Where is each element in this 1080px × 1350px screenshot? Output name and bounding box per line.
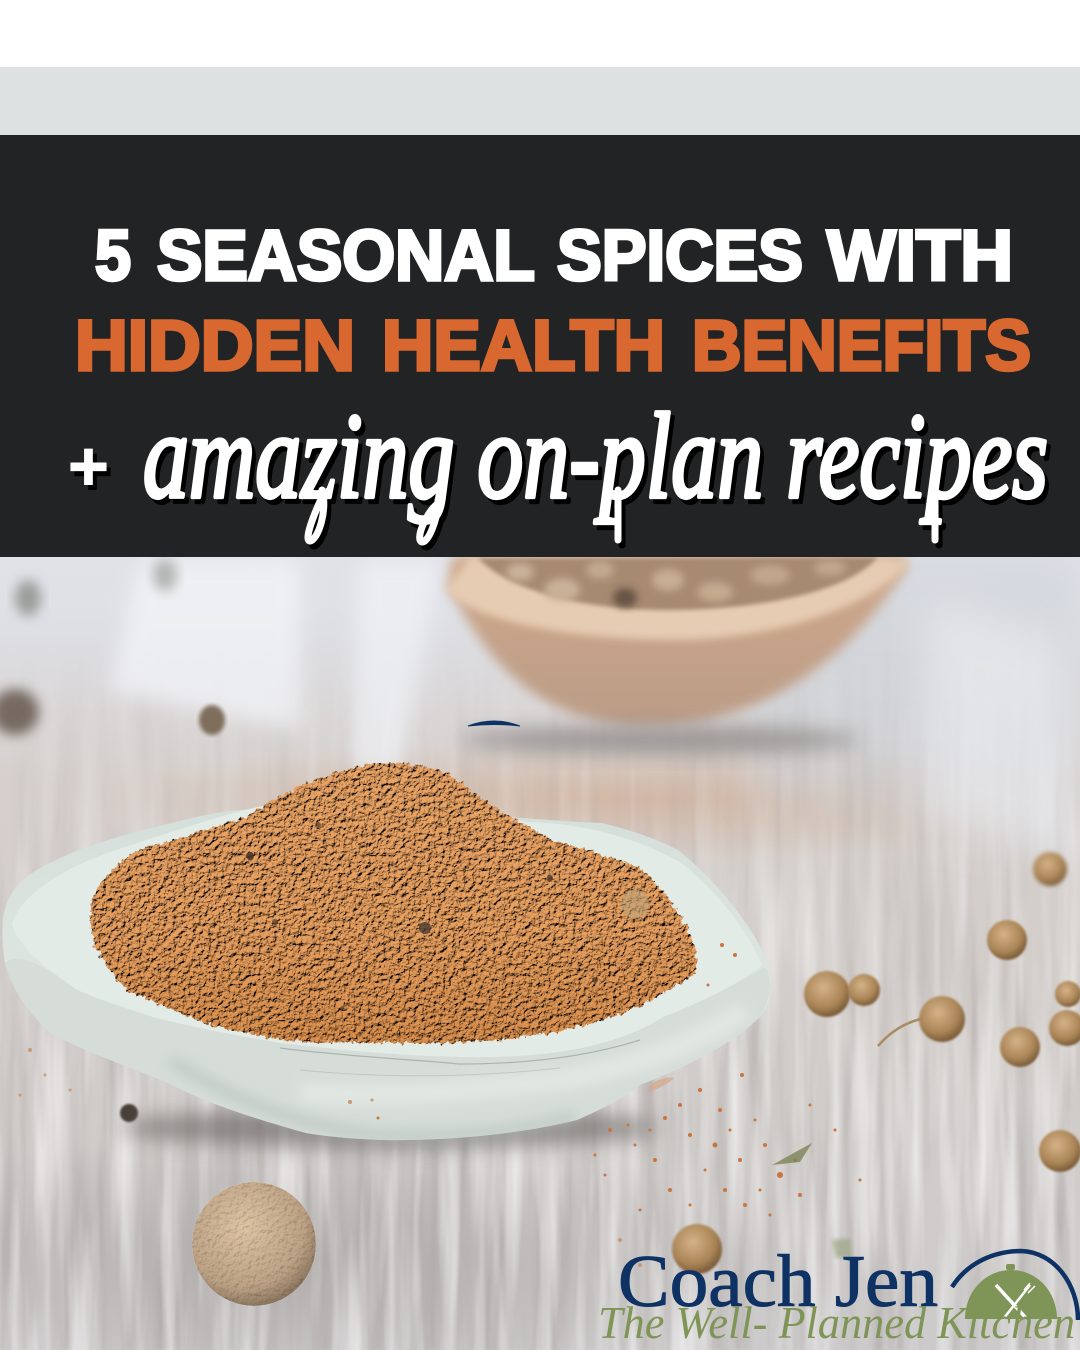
title line 2: [75, 307, 1031, 386]
dark title banner: [0, 135, 1080, 557]
title line 2: HIDDEN: [75, 307, 355, 386]
spice powder heap: [90, 762, 696, 1043]
logo wordmark: Coach Jen: [618, 1241, 938, 1323]
powder dark flecks: [246, 822, 649, 983]
blurred back bowl with seeds: [445, 556, 910, 754]
logo arc: [952, 1251, 1078, 1320]
small navy arc fragment: [468, 721, 520, 726]
white top margin: [0, 0, 1080, 67]
logo script tagline: The Well- Planned Kitchen: [598, 1299, 1075, 1349]
script subtitle: amazing on-plan recipes: [143, 390, 1048, 524]
title line 1: SEASONAL: [157, 217, 535, 296]
coriander seeds: [120, 852, 1080, 1274]
bowl outer body: [2, 806, 770, 1140]
title line 2: BENEFITS: [692, 307, 1031, 386]
bowl inner wall: [12, 805, 762, 1057]
bowl front wall shading: [5, 959, 770, 1140]
nutmeg ball: [192, 1182, 316, 1306]
title line 2: HEALTH: [382, 307, 665, 386]
logo: Coach Jen: [598, 1241, 1078, 1349]
script subtitle: amazing on-plan recipes: [147, 395, 1052, 529]
blurred background seeds: [0, 559, 225, 735]
script subtitle: +: [68, 427, 109, 505]
spice bowl: [2, 762, 770, 1148]
scattered spice specks: [18, 943, 862, 1267]
title line 1: [95, 217, 1013, 296]
logo cloche icon: [965, 1264, 1057, 1319]
title line 1: 5: [95, 217, 131, 296]
script subtitle: +: [72, 432, 113, 510]
title line 1: WITH: [827, 217, 1013, 296]
title line 1: SPICES: [557, 217, 803, 296]
